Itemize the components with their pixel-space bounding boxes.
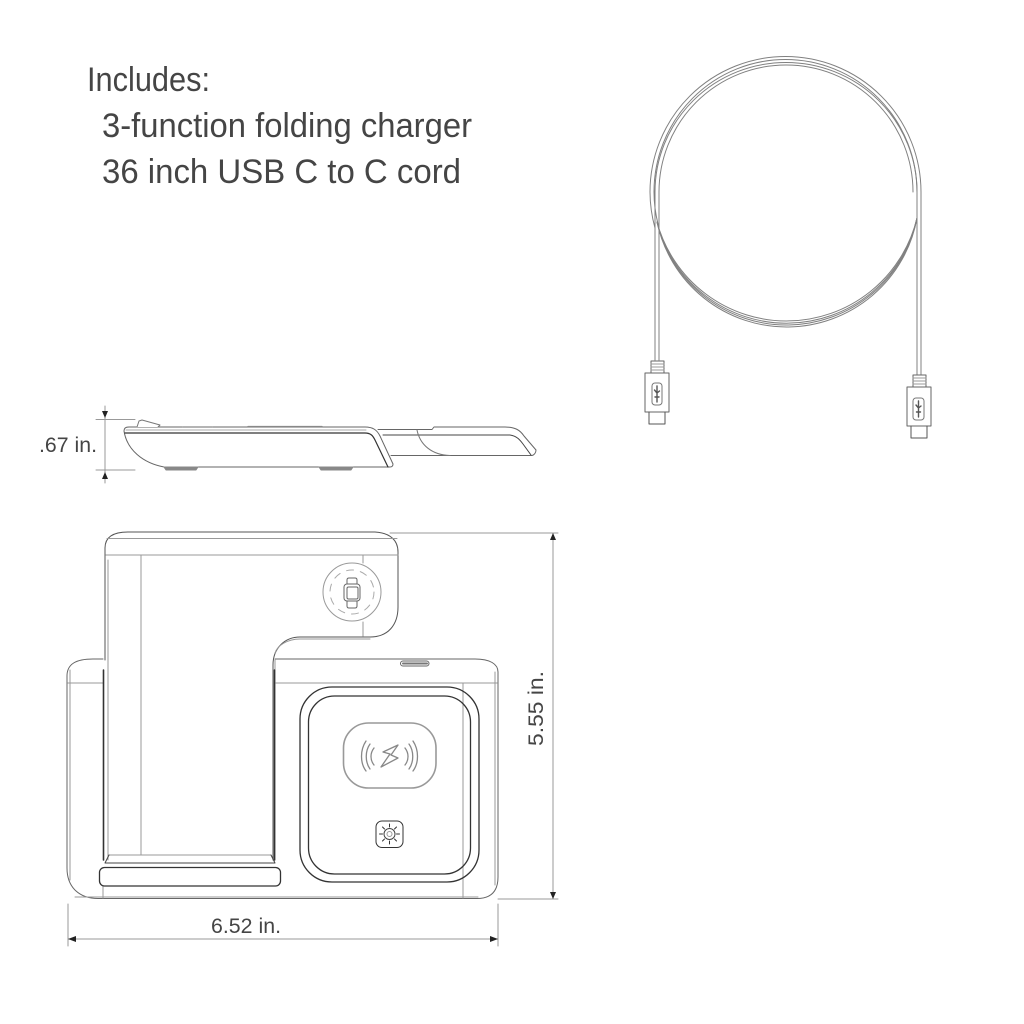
rear folded section — [378, 427, 536, 456]
side view of charger — [124, 420, 536, 470]
left USB C connector — [645, 361, 669, 424]
rubber feet — [164, 467, 353, 470]
upper body line — [125, 433, 388, 467]
icon: wireless bolt — [362, 741, 418, 771]
watch charger — [323, 563, 381, 621]
hinge button — [137, 420, 160, 427]
icon: brightness button — [376, 821, 403, 848]
wireless charging pad — [300, 687, 479, 882]
width dimension of top view — [68, 904, 498, 946]
icon: watch — [344, 578, 360, 608]
charging zone — [344, 723, 436, 788]
item: folding charger: 3-function folding charger — [102, 107, 472, 145]
includes text block — [87, 61, 472, 191]
USB C cable illustration — [645, 57, 931, 438]
pocket bottom edge — [105, 855, 275, 863]
folding bar — [100, 868, 280, 886]
label 6.52 in.: 6.52 in. — [211, 915, 281, 938]
height dimension of top view — [390, 533, 558, 899]
vertical arrows — [550, 533, 556, 899]
includes heading: Includes: — [87, 61, 210, 99]
panel inner lines — [106, 538, 398, 860]
height dimension — [39, 406, 135, 483]
right USB C connector — [907, 375, 931, 438]
USB port — [400, 661, 429, 666]
cable coil — [650, 57, 921, 375]
item: USB cord: 36 inch USB C to C cord — [102, 153, 461, 191]
label 5.55 in.: 5.55 in. — [525, 671, 548, 746]
base inner lines — [68, 670, 497, 898]
top view of charger — [67, 532, 498, 898]
panel hinge shadows — [104, 670, 274, 860]
folding upper panel — [105, 532, 398, 860]
horizontal arrows — [68, 936, 498, 942]
base outline — [67, 659, 498, 898]
height arrows — [102, 411, 108, 479]
top bumps — [183, 426, 322, 428]
height label: .67 in. — [39, 434, 97, 457]
front body — [124, 427, 393, 467]
